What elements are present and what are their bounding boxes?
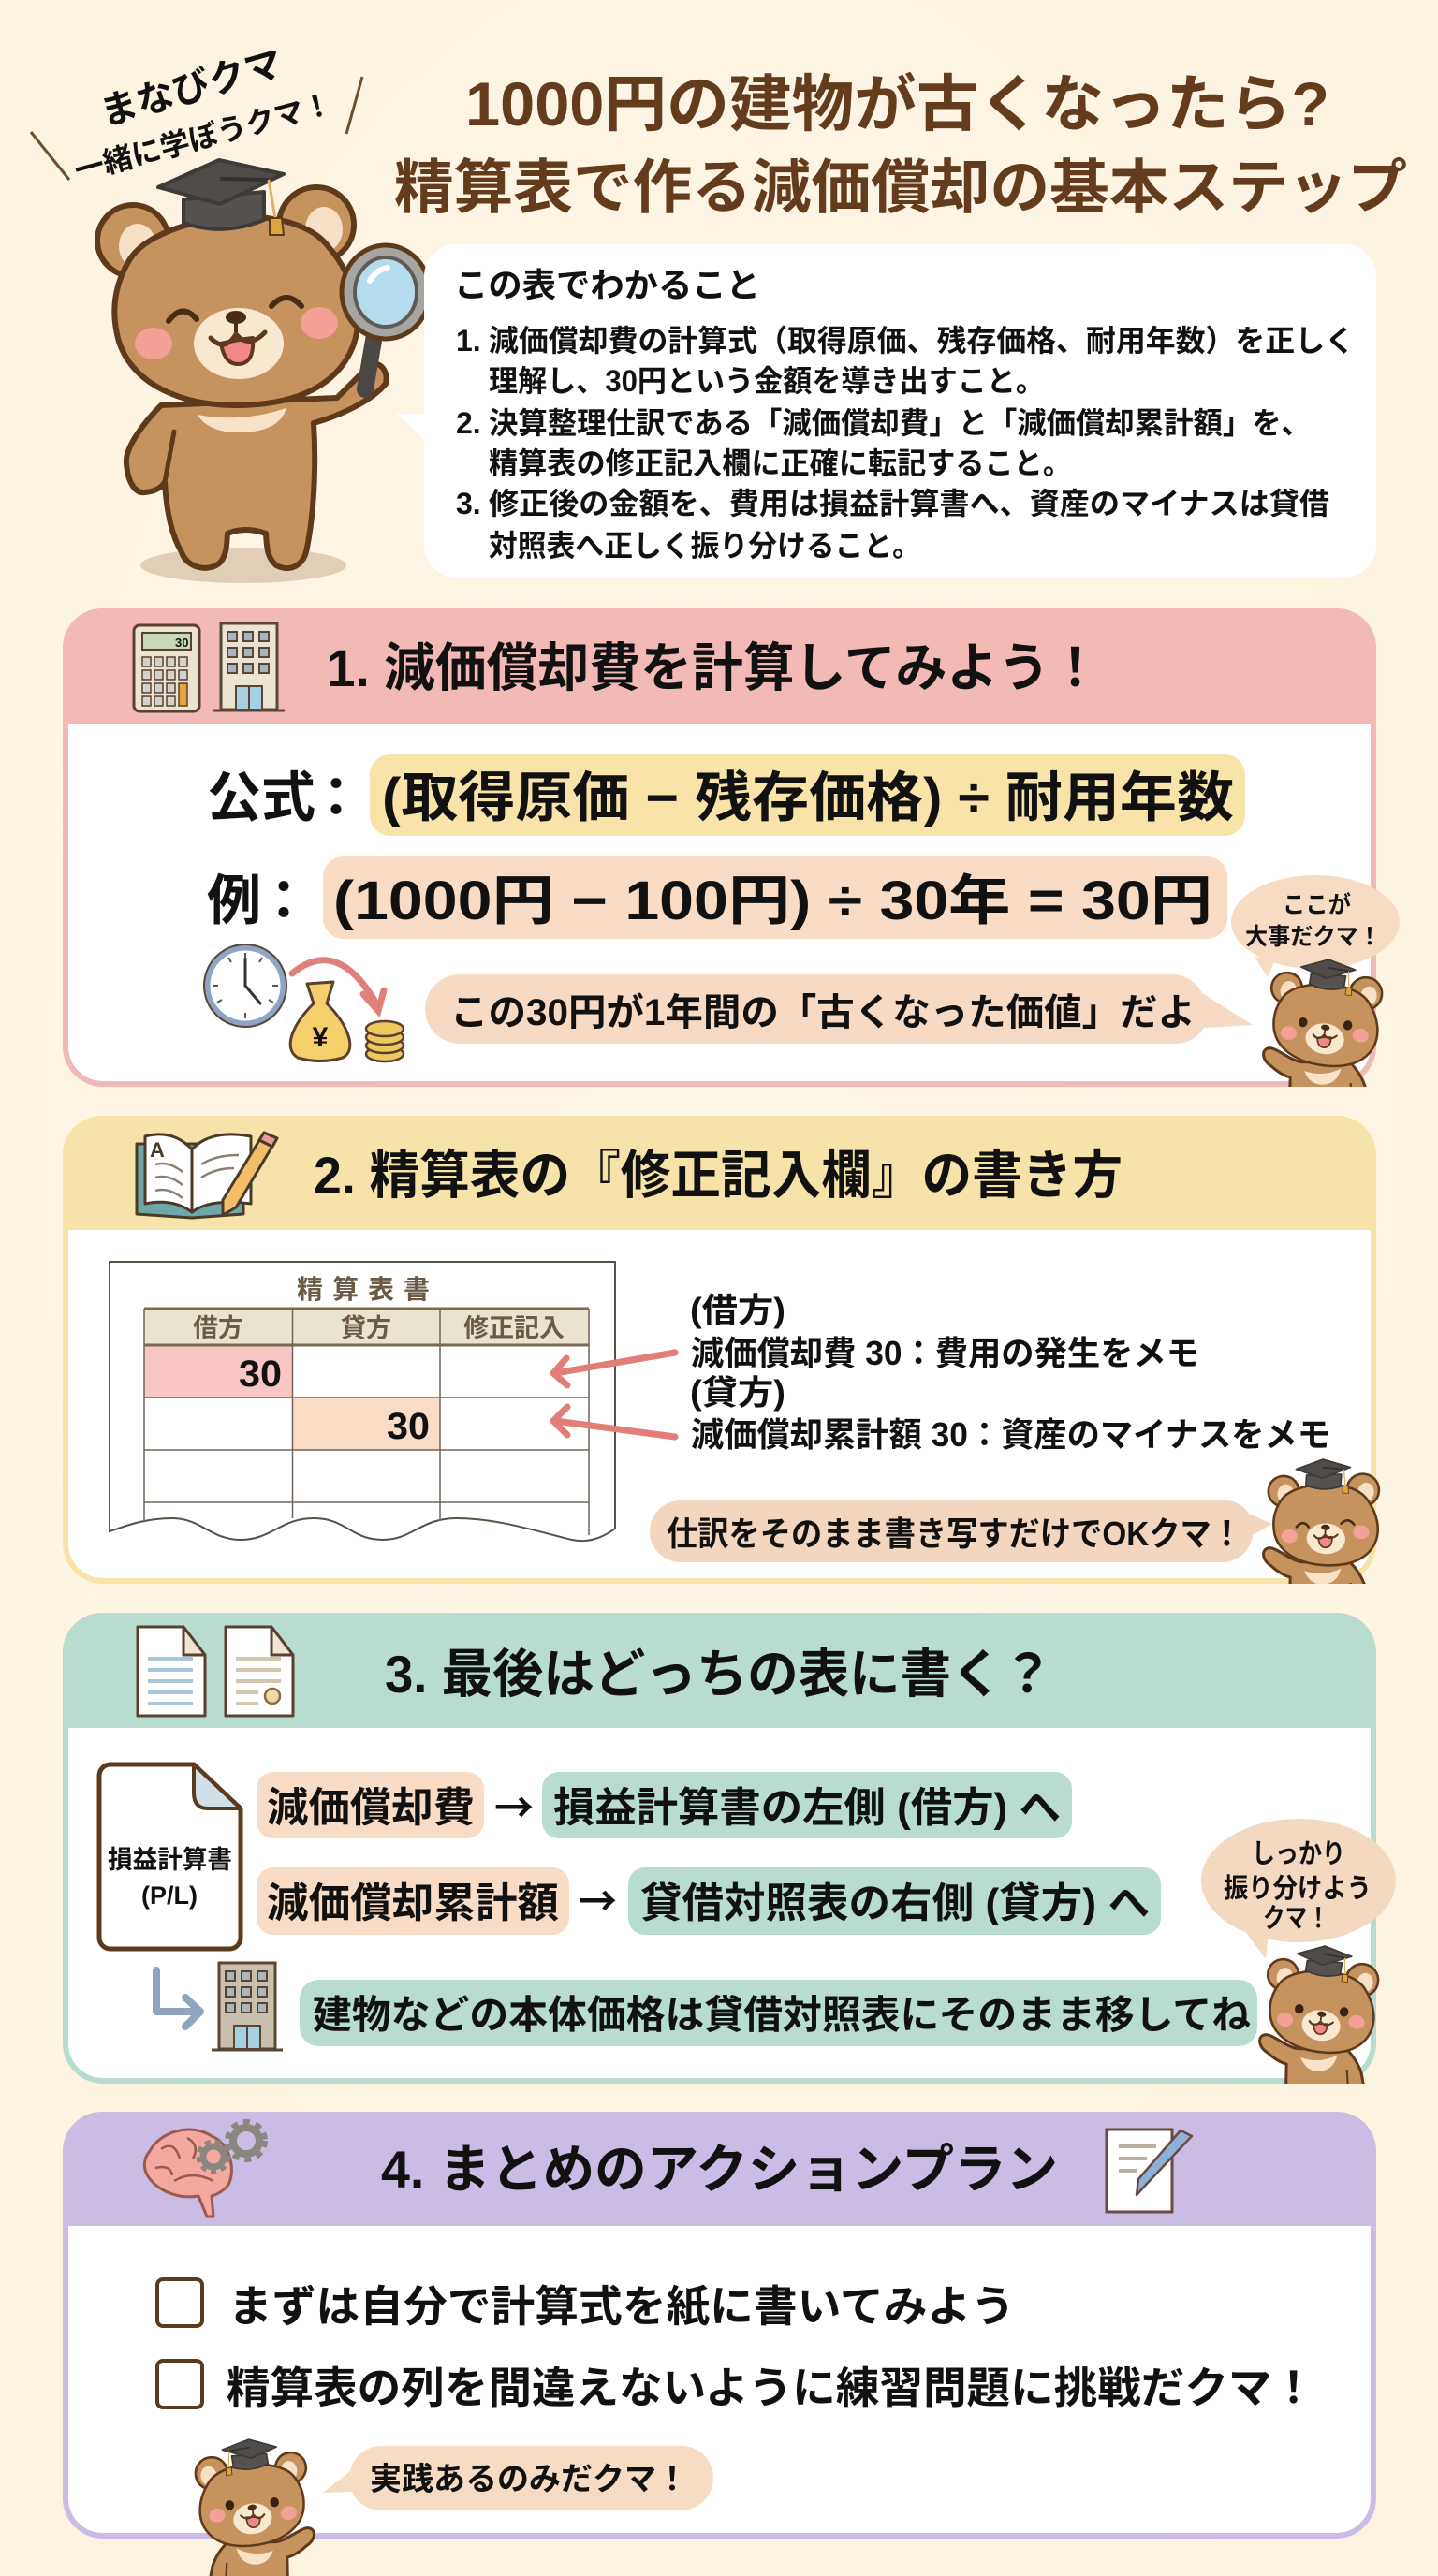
panel 3: which statement	[63, 1613, 1396, 2084]
arrow: credit entry	[553, 1407, 675, 1437]
heading 3: 3. 最後はどっちの表に書く？	[385, 1645, 1053, 1704]
example label: ：	[257, 871, 311, 931]
callout: practice: 実践あるのみだクマ！	[370, 2462, 688, 2497]
panel: what this table teaches: 2.	[456, 406, 481, 440]
callout: practice	[323, 2446, 713, 2510]
mascot caption: manabi kuma: 一緒に学ぼうクマ！	[71, 86, 336, 187]
panel: what this table teaches: 理解し、30円という金額を導き出すこと。	[489, 364, 1045, 398]
note: building price: 建物などの本体価格は貸借対照表にそのまま移してね	[313, 1993, 1251, 2037]
note: building price	[300, 1980, 1257, 2046]
bear mascot 3	[1258, 1945, 1380, 2084]
icon: open book	[137, 1133, 277, 1218]
speech bubble: important: ここが	[1283, 891, 1351, 918]
icon: certificate	[226, 1627, 293, 1716]
arrow: debit entry	[553, 1353, 675, 1385]
panel 2: worksheet adjustment column	[63, 1116, 1380, 1584]
journal notes: (借方)	[690, 1291, 785, 1329]
worksheet table: 30	[239, 1354, 282, 1395]
flow: accumulated depreciation to B/S: 貸借対照表の右側 (貸方) へ	[640, 1881, 1150, 1926]
callout: copy the entry	[650, 1500, 1272, 1562]
flow: depreciation expense to P/L: →	[494, 1775, 534, 1835]
journal notes: (貸方)	[690, 1373, 785, 1412]
journal notes: 減価償却累計額 30：資産のマイナスをメモ	[691, 1415, 1330, 1454]
flow: depreciation expense to P/L	[257, 1772, 1072, 1838]
panel: what this table teaches: この表でわかること	[454, 266, 760, 304]
icon: notepad and pen	[1107, 2130, 1192, 2212]
arrow: to building	[156, 1970, 200, 2027]
heading 2: 2. 精算表の『修正記入欄』の書き方	[314, 1146, 1123, 1205]
flow: depreciation expense to P/L: 損益計算書の左側 (借方) へ	[553, 1785, 1061, 1831]
mascot bear with magnifier	[97, 160, 430, 583]
flow: accumulated depreciation to B/S	[257, 1867, 1161, 1935]
title: 精算表で作る減価償却の基本ステップ	[394, 155, 1407, 221]
example pill: (1000円 − 100円) ÷ 30年 = 30円	[333, 871, 1212, 931]
bear mascot 1	[1262, 959, 1384, 1087]
panel: what this table teaches: 決算整理仕訳である「減価償却費」と「減価償却累計額」を、	[489, 406, 1311, 440]
panel: what this table teaches: 3.	[456, 487, 481, 520]
journal notes: 減価償却費 30：費用の発生をメモ	[691, 1334, 1199, 1372]
panel: what this table teaches: 精算表の修正記入欄に正確に転記すること。	[489, 446, 1072, 480]
panel: what this table teaches: 修正後の金額を、費用は損益計算書へ、資産のマイナスは貸借	[489, 487, 1329, 520]
journal notes	[690, 1291, 1330, 1454]
flow: depreciation expense to P/L: 減価償却費	[267, 1785, 475, 1831]
speech bubble: allocate properly: しっかり	[1252, 1839, 1345, 1869]
formula pill	[370, 754, 1245, 836]
panel 4: action plan	[63, 2112, 1376, 2576]
icon: brain and gears	[144, 2122, 265, 2217]
mascot caption: manabi kuma	[31, 43, 362, 187]
speech bubble: allocate properly: 振り分けよう	[1224, 1873, 1372, 1904]
icon: building	[212, 1963, 283, 2050]
speech bubble: allocate properly: クマ！	[1263, 1904, 1329, 1934]
income statement document	[99, 1764, 241, 1949]
icon: calculator	[134, 625, 199, 711]
checklist item 2: 精算表の列を間違えないように練習問題に挑戦だクマ！	[227, 2364, 1315, 2412]
panel: what this table teaches: 対照表へ正しく振り分けること。	[489, 529, 921, 563]
icon: coins	[366, 1021, 404, 1061]
bear mascot 4	[190, 2431, 316, 2576]
callout: this 30 yen	[425, 974, 1253, 1044]
icon: money bag: ¥	[313, 1022, 329, 1053]
icon: calculator: 30	[175, 636, 188, 650]
example pill	[323, 856, 1227, 939]
worksheet table: 貸方	[341, 1314, 391, 1342]
icon: clock	[204, 944, 286, 1027]
heading 1: 1. 減価償却費を計算してみよう！	[327, 638, 1101, 697]
flow: accumulated depreciation to B/S: →	[579, 1868, 617, 1928]
heading 4: 4. まとめのアクションプラン	[381, 2140, 1058, 2199]
flow: accumulated depreciation to B/S: 減価償却累計額	[267, 1881, 559, 1926]
formula label: ：	[309, 768, 363, 828]
title: 1000円の建物が古くなったら?	[465, 69, 1329, 139]
icon: open book: A	[150, 1138, 165, 1162]
worksheet table: 30	[387, 1406, 430, 1447]
icon: money bag	[290, 982, 350, 1061]
icon: document	[138, 1627, 205, 1716]
callout: copy the entry: 仕訳をそのまま書き写すだけでOKクマ！	[667, 1515, 1242, 1553]
arrow: value decline	[292, 960, 384, 1011]
worksheet table: 精算表書	[297, 1275, 430, 1304]
panel: what this table teaches	[397, 244, 1376, 578]
panel: what this table teaches: 減価償却費の計算式（取得原価、残存価格、耐用年数）を正しく	[489, 324, 1355, 358]
formula label: 公式	[207, 768, 315, 828]
worksheet table: 借方	[193, 1314, 243, 1342]
formula pill: (取得原価 − 残存価格) ÷ 耐用年数	[382, 768, 1234, 828]
callout: this 30 yen: この30円が1年間の「古くなった価値」だよ	[450, 992, 1196, 1033]
panel: what this table teaches: 1.	[456, 324, 481, 358]
worksheet table	[110, 1262, 615, 1541]
mascot caption: manabi kuma: まなびクマ	[95, 43, 287, 134]
title	[394, 69, 1407, 221]
income statement document: (P/L)	[141, 1881, 198, 1910]
icon: building	[213, 623, 285, 710]
checklist item 1: まずは自分で計算式を紙に書いてみよう	[228, 2282, 1015, 2331]
worksheet table: 修正記入	[463, 1314, 565, 1342]
example label: 例	[207, 871, 261, 931]
income statement document: 損益計算書	[108, 1846, 232, 1874]
panel 1: calculate depreciation	[63, 608, 1400, 1087]
bear mascot 2	[1262, 1458, 1380, 1584]
speech bubble: important: 大事だクマ！	[1245, 924, 1381, 950]
speech bubble: allocate properly	[1201, 1819, 1396, 1959]
speech bubble: important	[1231, 875, 1400, 977]
